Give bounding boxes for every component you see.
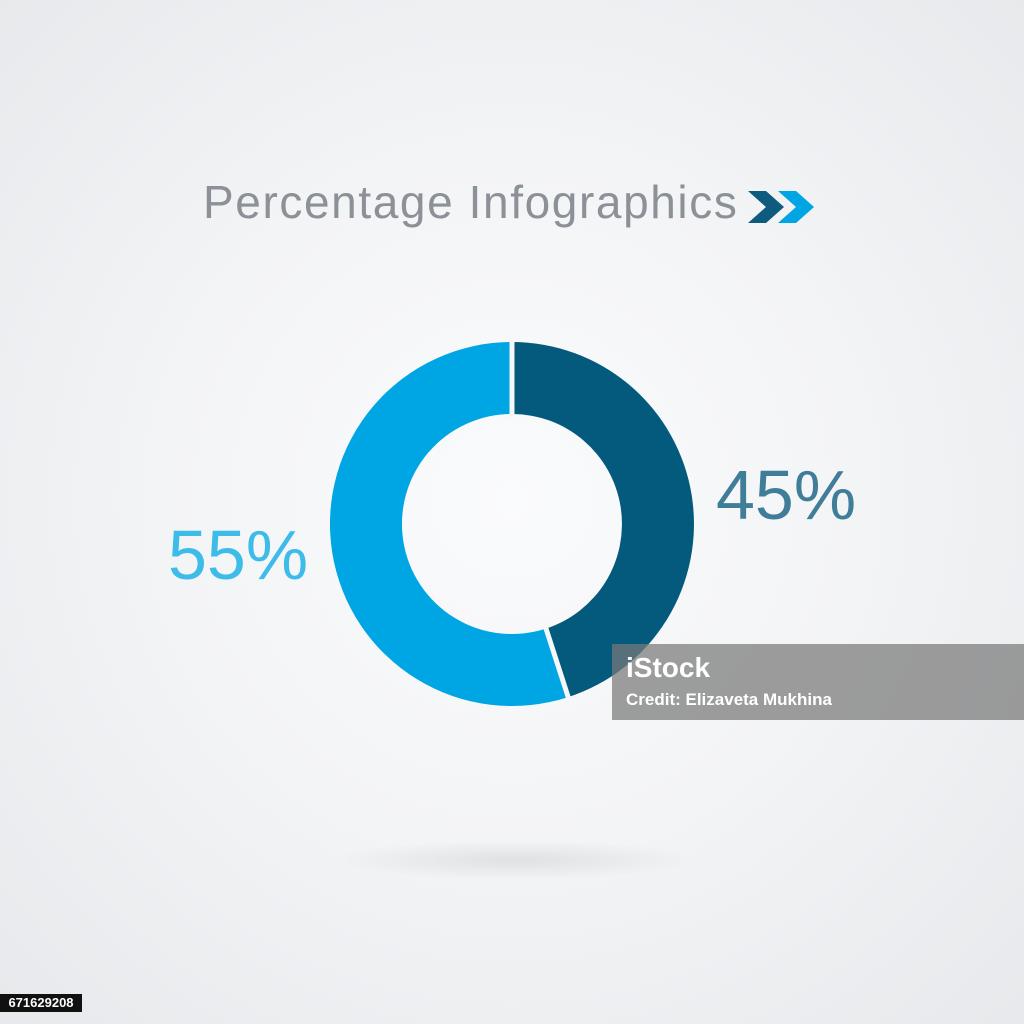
id tag: 671629208 — [8, 995, 74, 1010]
watermark: Credit: Elizaveta Mukhina — [626, 690, 832, 709]
id tag — [0, 994, 82, 1012]
watermark: iStock — [626, 652, 710, 683]
icon: double chevron — [748, 191, 814, 223]
donut chart — [330, 342, 694, 706]
segment 55% — [330, 342, 568, 706]
label 55%: 55% — [168, 516, 308, 594]
shadow under chart — [330, 840, 700, 880]
title text: Percentage Infographics — [203, 176, 738, 228]
watermark — [612, 644, 1024, 720]
title — [203, 176, 814, 228]
segment 45% — [512, 342, 694, 697]
label 45%: 45% — [716, 456, 856, 534]
